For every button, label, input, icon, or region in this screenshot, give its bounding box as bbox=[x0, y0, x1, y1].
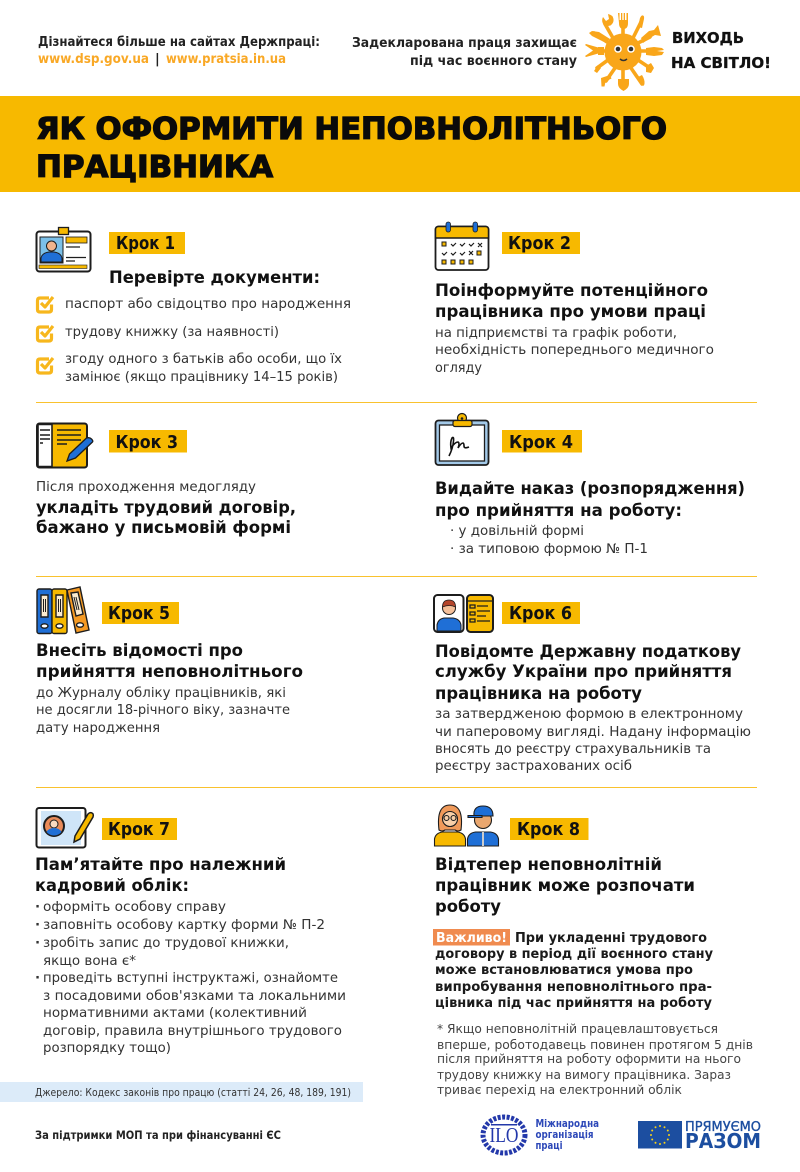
source bar: Джерело: Кодекс законів про працю (статті 24, 26, 48, 189, 191) bbox=[35, 1086, 351, 1099]
list: step 7: · bbox=[35, 900, 40, 915]
text: step 5: дату народження bbox=[36, 721, 160, 736]
checklist: documents: замінює (якщо працівнику 14–15 років) bbox=[65, 370, 338, 385]
list: step 7: заповніть особову картку форми № П-2 bbox=[43, 917, 325, 933]
wrench bbox=[602, 14, 614, 26]
list: step 7 bbox=[35, 899, 346, 1056]
list: step 4: · за типовою формою № П-1 bbox=[450, 542, 648, 557]
heading: step 6 bbox=[435, 642, 741, 704]
text: step 3 intro: Після проходження медогляду bbox=[36, 480, 256, 495]
list: step 7: якщо вона є* bbox=[43, 954, 136, 969]
icon: ID card bbox=[36, 228, 90, 272]
list: step 7: договір, правила внутрішнього трудового bbox=[43, 1024, 342, 1039]
list: step 7: проведіть вступні інструктажі, ознайомте bbox=[43, 971, 338, 986]
logo: ILO bbox=[483, 1117, 599, 1153]
text: step 2: огляду bbox=[435, 361, 482, 376]
text: step 6: чи паперовому вигляді. Надану інформацію bbox=[435, 725, 751, 740]
header: Derzhpratsi websites: www.pratsia.in.ua bbox=[166, 52, 286, 67]
callout: important bbox=[433, 929, 713, 1011]
list: step 7: зробіть запис до трудової книжки, bbox=[43, 935, 289, 951]
hammer bbox=[601, 75, 612, 86]
heading: step 7: кадровий облік: bbox=[35, 876, 189, 896]
title banner: ПРАЦІВНИКА bbox=[36, 150, 273, 185]
shovel bbox=[618, 79, 629, 91]
text: step 2: необхідність попереднього медичного bbox=[435, 342, 714, 358]
campaign name: ВИХОДЬ bbox=[672, 29, 744, 47]
logo: ILO: ILO bbox=[490, 1123, 518, 1147]
campaign name: НА СВІТЛО! bbox=[671, 54, 771, 72]
header: Derzhpratsi websites: Дізнайтеся більше на сайтах Держпраці: bbox=[38, 35, 320, 50]
checklist: documents: згоду одного з батьків або особи, що їх bbox=[65, 351, 342, 367]
brush bbox=[638, 75, 645, 86]
icon: signed clipboard bbox=[436, 414, 488, 465]
text: step 6: вносять до реєстру страхувальників та bbox=[435, 742, 711, 757]
left pliers bbox=[585, 44, 600, 57]
list: step 7: нормативними актами (колективний bbox=[43, 1006, 307, 1021]
title banner: ЯК ОФОРМИТИ НЕПОВНОЛІТНЬОГО bbox=[36, 112, 667, 147]
badge: step 1: Крок 1 bbox=[116, 233, 175, 254]
face bbox=[614, 45, 622, 53]
badge: step 8: Крок 8 bbox=[517, 819, 580, 840]
badge: step 3: Крок 3 bbox=[116, 432, 178, 453]
logo: ILO: Міжнародна bbox=[536, 1117, 599, 1130]
icon: two workers bbox=[434, 805, 498, 846]
badge: step 7: Крок 7 bbox=[108, 819, 170, 840]
support note: За підтримки МОП та при фінансуванні ЄС bbox=[35, 1128, 281, 1142]
heading: step 2: працівника про умови праці bbox=[435, 302, 706, 322]
footnote: вперше, роботодавець повинен протягом 5 днів bbox=[437, 1037, 753, 1052]
heading: step 7: Пам’ятайте про належний bbox=[35, 855, 286, 875]
logo: EU flag with campaign name: ПРЯМУЄМО bbox=[685, 1120, 761, 1135]
text: step 6 bbox=[435, 707, 751, 774]
heading: step 3: бажано у письмовій формі bbox=[36, 518, 291, 538]
heading: step 1: Перевірте документи: bbox=[109, 268, 320, 288]
header: campaign slogan: Задекларована праця захищає bbox=[352, 36, 577, 51]
footnote: трудову книжку на вимогу працівника. Зараз bbox=[437, 1067, 731, 1082]
trumpet bbox=[641, 25, 661, 43]
list: step 7: з посадовими обов'язками та локальними bbox=[43, 988, 346, 1004]
heading: step 3: укладіть трудовий договір, bbox=[36, 498, 296, 518]
heading: step 5 bbox=[36, 641, 303, 682]
campaign name bbox=[671, 29, 771, 72]
footnote: після прийняття на роботу оформити на нього bbox=[437, 1051, 741, 1066]
icon: personnel record and pencil bbox=[36, 808, 93, 848]
list: step 4 bbox=[450, 524, 648, 557]
list: step 4: · у довільній формі bbox=[450, 524, 584, 539]
badge: step 5: Крок 5 bbox=[108, 603, 170, 624]
icon: sun with tools bbox=[585, 13, 664, 91]
right pliers bbox=[646, 47, 664, 56]
panel: step 3 bbox=[36, 424, 296, 538]
checklist: documents: трудову книжку (за наявності) bbox=[65, 325, 279, 340]
heading: step 2: Поінформуйте потенційного bbox=[435, 281, 708, 301]
header: Derzhpratsi websites: | bbox=[155, 52, 160, 67]
checklist: documents: паспорт або свідоцтво про народження bbox=[65, 296, 351, 312]
header: campaign slogan: під час воєнного стану bbox=[410, 54, 578, 69]
heading: step 2 bbox=[435, 281, 708, 322]
heading: step 6: працівника на роботу bbox=[435, 684, 642, 704]
footnote bbox=[437, 1021, 753, 1097]
panel: step 2 bbox=[435, 222, 714, 376]
rake bbox=[618, 13, 628, 29]
text: step 5: до Журналу обліку працівників, які bbox=[36, 685, 286, 701]
logo: EU flag with campaign name bbox=[638, 1120, 761, 1153]
title banner bbox=[0, 96, 800, 192]
heading: step 4: про прийняття на роботу: bbox=[435, 501, 682, 521]
panel: step 8 bbox=[433, 805, 753, 1097]
header: Derzhpratsi websites: www.dsp.gov.ua bbox=[38, 52, 149, 67]
heading: step 7 bbox=[35, 855, 286, 896]
heading: step 8: Відтепер неповнолітній bbox=[435, 855, 662, 875]
footnote: триває перехід на електронний облік bbox=[437, 1082, 682, 1097]
list: step 7: · bbox=[35, 918, 40, 933]
list: step 7: оформіть особову справу bbox=[43, 899, 226, 915]
heading: step 5: Внесіть відомості про bbox=[36, 641, 243, 661]
icon: employee card and form bbox=[434, 595, 493, 632]
source bar bbox=[0, 1082, 363, 1102]
list: step 7: · bbox=[35, 936, 40, 951]
icon: calendar bbox=[436, 222, 488, 270]
footnote: * Якщо неповнолітній працевлаштовується bbox=[437, 1021, 718, 1036]
panel: step 1 bbox=[36, 228, 351, 385]
list: step 7: · bbox=[35, 971, 40, 986]
badge: step 2: Крок 2 bbox=[508, 233, 571, 254]
heading: step 4 bbox=[435, 479, 745, 521]
text: step 6: за затвердженою формою в електронному bbox=[435, 707, 743, 722]
callout: important: цівника під час прийняття на роботу bbox=[435, 995, 712, 1011]
callout: important: При укладенні трудового bbox=[515, 931, 707, 946]
logo: EU flag with campaign name: РАЗОМ bbox=[685, 1129, 761, 1153]
screwdriver bbox=[638, 15, 644, 28]
logo: ILO: праці bbox=[536, 1139, 562, 1152]
callout: important: Важливо! bbox=[436, 930, 507, 946]
spokes bbox=[594, 22, 650, 84]
panel: step 7 bbox=[35, 808, 346, 1056]
checklist: documents bbox=[38, 296, 351, 385]
callout: important: договору в період дії воєнного стану bbox=[435, 947, 713, 962]
callout: important: випробування неповнолітнього пра- bbox=[435, 979, 712, 995]
heading: step 6: Повідомте Державну податкову bbox=[435, 642, 741, 662]
panel: step 4 bbox=[435, 414, 745, 557]
heading: step 3 bbox=[36, 498, 296, 538]
heading: step 8: працівник може розпочати bbox=[435, 876, 695, 896]
text: step 5 bbox=[36, 685, 290, 736]
bent pipe bbox=[646, 63, 654, 73]
icon: notebook and pen bbox=[37, 424, 93, 468]
badge: step 6: Крок 6 bbox=[509, 603, 572, 624]
text: step 6: реєстру застрахованих осіб bbox=[435, 758, 632, 774]
badge: step 4: Крок 4 bbox=[509, 432, 573, 453]
icon: binders bbox=[37, 587, 89, 634]
list: step 7: розпорядку тощо) bbox=[43, 1041, 171, 1056]
heading: step 6: службу України про прийняття bbox=[435, 662, 732, 682]
header: campaign slogan bbox=[352, 36, 578, 69]
heading: step 4: Видайте наказ (розпорядження) bbox=[435, 479, 745, 499]
logo: ILO: організація bbox=[536, 1128, 594, 1141]
text: step 2: на підприємстві та графік роботи, bbox=[435, 325, 677, 341]
heading: step 8: роботу bbox=[435, 897, 501, 917]
callout: important: може встановлюватися умова про bbox=[435, 963, 693, 978]
panel: step 6 bbox=[434, 595, 751, 774]
header: Derzhpratsi websites bbox=[38, 35, 320, 67]
heading: step 8 bbox=[435, 855, 695, 917]
text: step 5: не досягли 18-річного віку, зазначте bbox=[36, 703, 290, 718]
text: step 2 bbox=[435, 325, 714, 376]
panel: step 5 bbox=[36, 587, 303, 736]
heading: step 5: прийняття неповнолітнього bbox=[36, 662, 303, 682]
knife bbox=[589, 31, 610, 43]
